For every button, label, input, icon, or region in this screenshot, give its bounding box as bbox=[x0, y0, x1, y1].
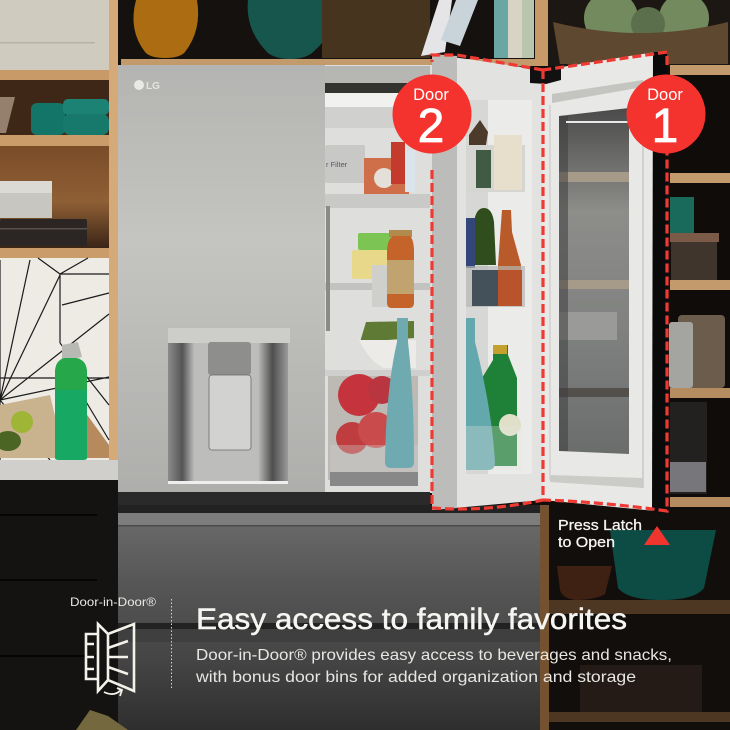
label: door-in-door: Door-in-Door® bbox=[70, 595, 156, 609]
door glass panel bbox=[559, 108, 629, 454]
vegetable bowl bbox=[359, 321, 416, 368]
callout: press latch to open: to Open bbox=[558, 534, 615, 551]
panel: counter and base cabinet bbox=[0, 460, 118, 730]
icon: books on shelf bbox=[421, 0, 548, 66]
icon: teal bowl bbox=[610, 530, 716, 600]
heading: Easy access to family favorites bbox=[196, 603, 627, 636]
text block: description: with bonus door bins for added organization and storage bbox=[195, 669, 636, 686]
badge: door 1: Door bbox=[647, 86, 683, 104]
dashed outline: door 1 bbox=[543, 52, 667, 511]
black door edge bbox=[652, 52, 667, 511]
badge: door 1 bbox=[626, 74, 706, 154]
air filter box: r Filter bbox=[326, 160, 348, 169]
crisper drawer with apples bbox=[328, 374, 418, 486]
air filter box bbox=[325, 145, 365, 183]
door bin top bbox=[466, 120, 525, 192]
icon: beige object at bottom bbox=[76, 710, 128, 730]
panel: fridge interior bbox=[325, 65, 435, 493]
panel: upper left cabinet door bbox=[0, 0, 109, 70]
icon: lower shelf boxes bbox=[580, 665, 702, 712]
icon: fruit bag bbox=[0, 395, 109, 458]
icon: wicker basket with melons bbox=[553, 0, 728, 64]
panel: top center shelf with decor bbox=[118, 0, 543, 66]
icon: containers on right shelves bbox=[669, 197, 725, 494]
panel: door 2 open bbox=[432, 54, 543, 510]
panel: left wood shelving bbox=[0, 0, 118, 462]
panel: door 1 open bbox=[543, 52, 667, 511]
panel: left fridge door bbox=[118, 65, 325, 505]
callout: press latch to open bbox=[558, 517, 642, 551]
arrow: latch pointer bbox=[644, 526, 670, 545]
icon: door-in-door fridge bbox=[86, 624, 134, 696]
badge: door 2: Door bbox=[413, 86, 449, 104]
panel: geometric tile wall bbox=[0, 258, 109, 460]
jar of sauce bbox=[387, 230, 414, 308]
food containers top shelf bbox=[364, 142, 415, 194]
divider: dotted line bbox=[170, 599, 172, 690]
icon: brown bowl bbox=[557, 566, 612, 600]
door bin middle bbox=[466, 208, 525, 307]
food containers middle shelf bbox=[352, 233, 393, 307]
panel: freezer drawer bbox=[118, 492, 540, 730]
badge: door 2: 2 bbox=[418, 100, 444, 153]
logo: LG: LG bbox=[146, 81, 160, 92]
callout: press latch to open: Press Latch bbox=[558, 517, 642, 534]
door bottles bbox=[466, 318, 522, 470]
panel: right shelving bbox=[540, 0, 730, 730]
icon: green ribbed vase bbox=[248, 0, 339, 59]
icon: woven basket on shelf bbox=[322, 0, 430, 58]
icon: white bowls and plates bbox=[0, 181, 87, 246]
icon: door hinge bbox=[530, 68, 561, 84]
badge: door 2 bbox=[392, 74, 472, 154]
icon: amber vase bbox=[133, 0, 198, 58]
logo: LG bbox=[134, 80, 160, 92]
text block: description: Door-in-Door® provides easy access to beverages and snacks, bbox=[196, 647, 672, 664]
badge: door 1: 1 bbox=[652, 100, 678, 153]
text block: description bbox=[195, 647, 672, 686]
dashed outline: door 2 bbox=[432, 55, 543, 509]
tall blue glass bottle bbox=[385, 318, 414, 468]
water and ice dispenser bbox=[168, 328, 290, 484]
icon: teal bowls bbox=[0, 97, 109, 135]
icon: green water bottle bbox=[55, 342, 87, 460]
